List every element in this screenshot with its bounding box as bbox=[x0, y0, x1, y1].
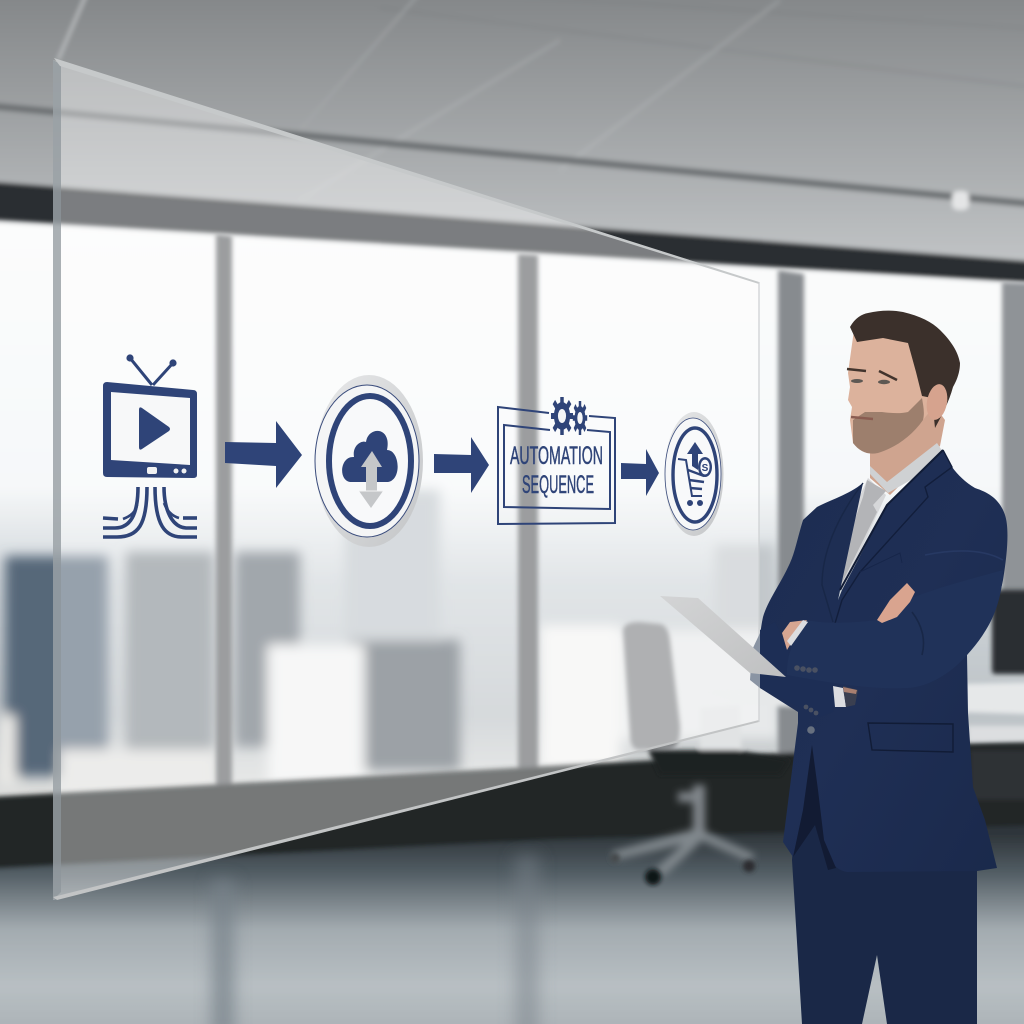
city skyline behind windows bbox=[0, 490, 780, 794]
icon: cloud upload and download badge bbox=[315, 375, 423, 547]
sleeve buttons bbox=[794, 665, 818, 734]
crossed forearm bbox=[787, 570, 1003, 688]
eyes bbox=[851, 379, 863, 383]
trousers bbox=[792, 800, 977, 1024]
lower shirt cuff and hand bbox=[833, 686, 858, 707]
inner frame bbox=[504, 425, 610, 509]
arrow 3 bbox=[621, 449, 659, 496]
jacket bbox=[759, 450, 1007, 872]
background furniture: desk, monitor and chair bbox=[610, 590, 1024, 885]
tablet bbox=[660, 596, 786, 677]
hair bbox=[850, 311, 960, 428]
right hand bbox=[877, 583, 915, 623]
jacket lapels and folds bbox=[822, 450, 1003, 752]
icon: shopping cart revenue badge bbox=[664, 412, 724, 536]
neck bbox=[870, 400, 945, 495]
shirt and collar bbox=[838, 443, 943, 590]
icon: shopping cart revenue badge: S bbox=[702, 463, 709, 474]
eyebrows bbox=[847, 369, 897, 380]
glass panel bbox=[53, 58, 760, 900]
head bbox=[847, 311, 960, 454]
label: AUTOMATION: AUTOMATION bbox=[510, 442, 603, 470]
panel: automation sequence box bbox=[498, 397, 615, 524]
arrow 1 bbox=[225, 421, 302, 488]
icon: TV with play button and cables bbox=[103, 354, 197, 537]
mouth bbox=[851, 417, 873, 419]
ear bbox=[924, 383, 950, 421]
arrow 2 bbox=[434, 437, 489, 493]
beard bbox=[853, 398, 924, 454]
icon: gears bbox=[551, 397, 587, 435]
label: SEQUENCE: SEQUENCE bbox=[522, 471, 594, 499]
inner jacket opening bbox=[793, 745, 836, 870]
outer frame bbox=[498, 407, 615, 524]
left hand and shirt cuff bbox=[782, 620, 808, 650]
businessman bbox=[759, 311, 1007, 1024]
necktie bbox=[841, 480, 886, 585]
lower sleeve bbox=[760, 622, 835, 717]
